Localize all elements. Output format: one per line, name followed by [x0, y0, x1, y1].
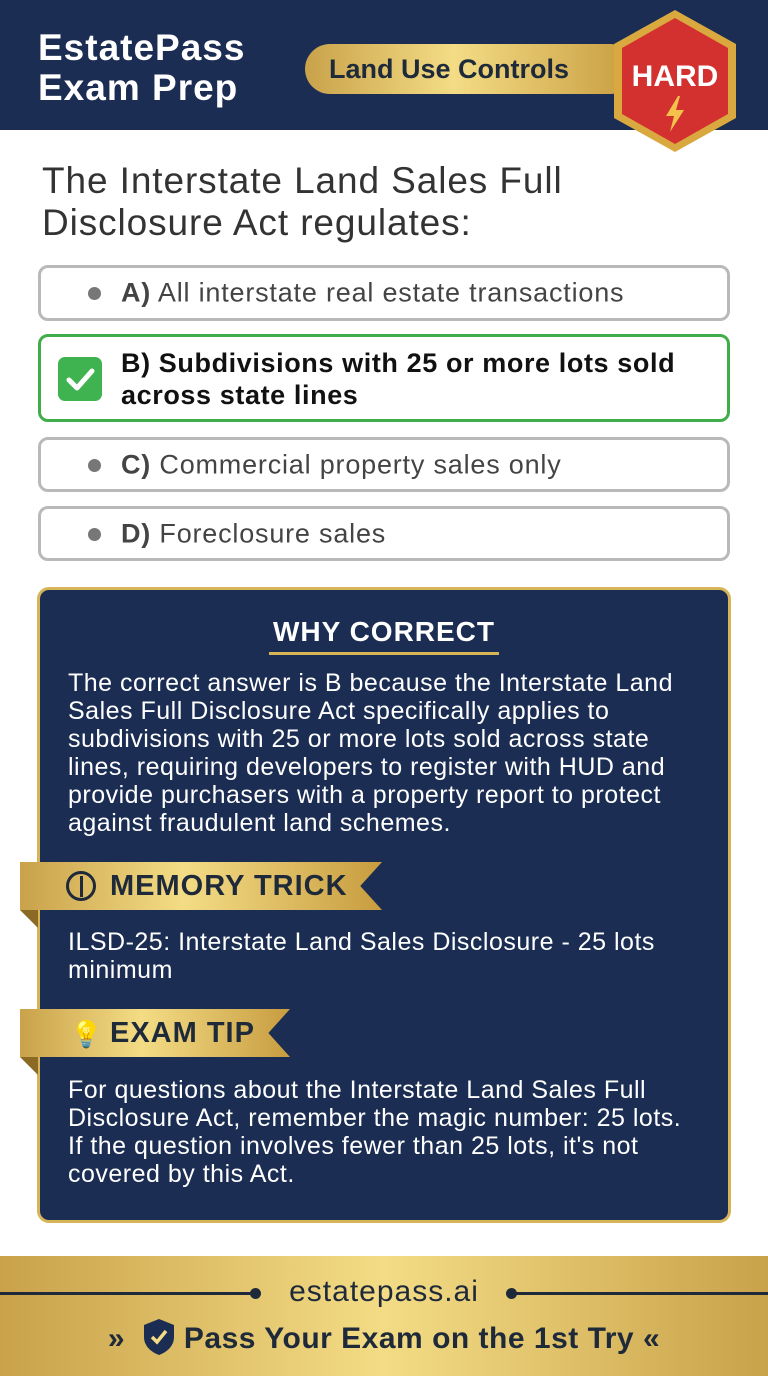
- question: The Interstate Land Sales Full: [42, 160, 563, 201]
- panel: explanation: [37, 587, 731, 1223]
- why correct text: Sales Full Disclosure Act specifically applies to: [68, 697, 609, 725]
- brand title: Exam Prep: [38, 67, 238, 108]
- icon: bulb: 💡: [70, 1019, 102, 1049]
- exam tip text: For questions about the Interstate Land Sales Full: [68, 1076, 646, 1104]
- footer: [0, 1256, 768, 1376]
- footer url: [0, 1292, 258, 1295]
- exam tip text: If the question involves fewer than 25 lots, it's not: [68, 1132, 638, 1160]
- why correct text: provide purchasers with a property report to protect: [68, 781, 661, 809]
- option C: C) Commercial property sales only: [121, 449, 562, 479]
- ribbon: exam tip: [20, 1009, 290, 1075]
- exam tip text: Disclosure Act, remember the magic number: 25 lots.: [68, 1104, 681, 1132]
- footer: estatepass.ai: [289, 1275, 479, 1308]
- option C: [38, 437, 730, 492]
- memory trick text: ILSD-25: Interstate Land Sales Disclosure - 25 lots: [68, 928, 655, 956]
- tagline: » Pass Your Exam on the 1st Try «: [108, 1322, 660, 1355]
- difficulty badge: HARD: [632, 60, 718, 93]
- option D: [38, 506, 730, 561]
- brand title: [38, 27, 245, 108]
- icon: check: [58, 357, 102, 401]
- question: [42, 160, 563, 243]
- heading: why correct: WHY CORRECT: [273, 616, 495, 647]
- icon: brain: [66, 871, 96, 901]
- difficulty badge: [614, 10, 736, 152]
- topic pill: [305, 44, 635, 94]
- why correct text: [68, 669, 673, 837]
- header: [0, 0, 768, 130]
- option D: D) Foreclosure sales: [121, 518, 386, 548]
- topic pill: Land Use Controls: [329, 54, 569, 84]
- memory trick text: [68, 928, 655, 984]
- why correct text: The correct answer is B because the Interstate Land: [68, 669, 673, 697]
- why correct text: subdivisions with 25 or more lots sold across state: [68, 725, 649, 753]
- option B correct: B) Subdivisions with 25 or more lots sold: [121, 348, 675, 378]
- question: Disclosure Act regulates:: [42, 202, 472, 243]
- option A: [38, 265, 730, 321]
- why correct text: against fraudulent land schemes.: [68, 809, 451, 837]
- option B correct: [38, 334, 730, 422]
- option A: A) All interstate real estate transactions: [121, 278, 624, 308]
- memory trick text: minimum: [68, 956, 173, 984]
- exam tip text: covered by this Act.: [68, 1160, 295, 1188]
- why correct text: lines, requiring developers to register with HUD and: [68, 753, 665, 781]
- exam tip text: [68, 1076, 681, 1188]
- ribbon: memory trick: MEMORY TRICK: [110, 870, 348, 902]
- option B correct: across state lines: [121, 380, 358, 410]
- ribbon: exam tip: EXAM TIP: [110, 1017, 255, 1049]
- brand title: EstatePass: [38, 27, 245, 68]
- ribbon: memory trick: [20, 862, 382, 928]
